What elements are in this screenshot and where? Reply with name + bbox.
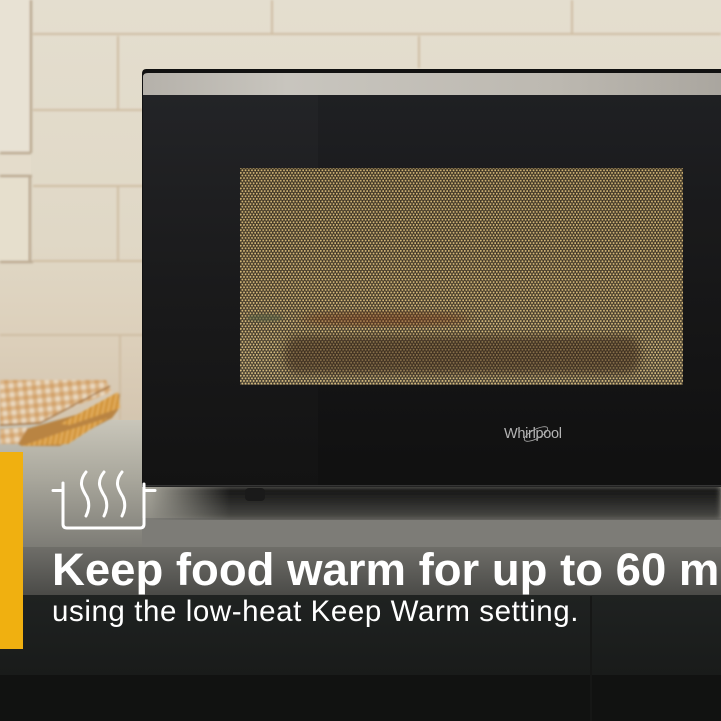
steel top band [143, 73, 721, 95]
countertop [0, 420, 721, 675]
foot [245, 488, 265, 501]
folded towels [0, 380, 120, 446]
microwave body [142, 69, 721, 501]
brand logo: Whirlpool [504, 426, 562, 442]
icon: steaming pot [52, 470, 156, 530]
tiled wall [0, 0, 721, 440]
window mesh [240, 168, 683, 385]
subheading: using the low-heat Keep Warm setting. [52, 595, 579, 628]
door [143, 95, 721, 485]
yellow accent bar [0, 452, 23, 649]
